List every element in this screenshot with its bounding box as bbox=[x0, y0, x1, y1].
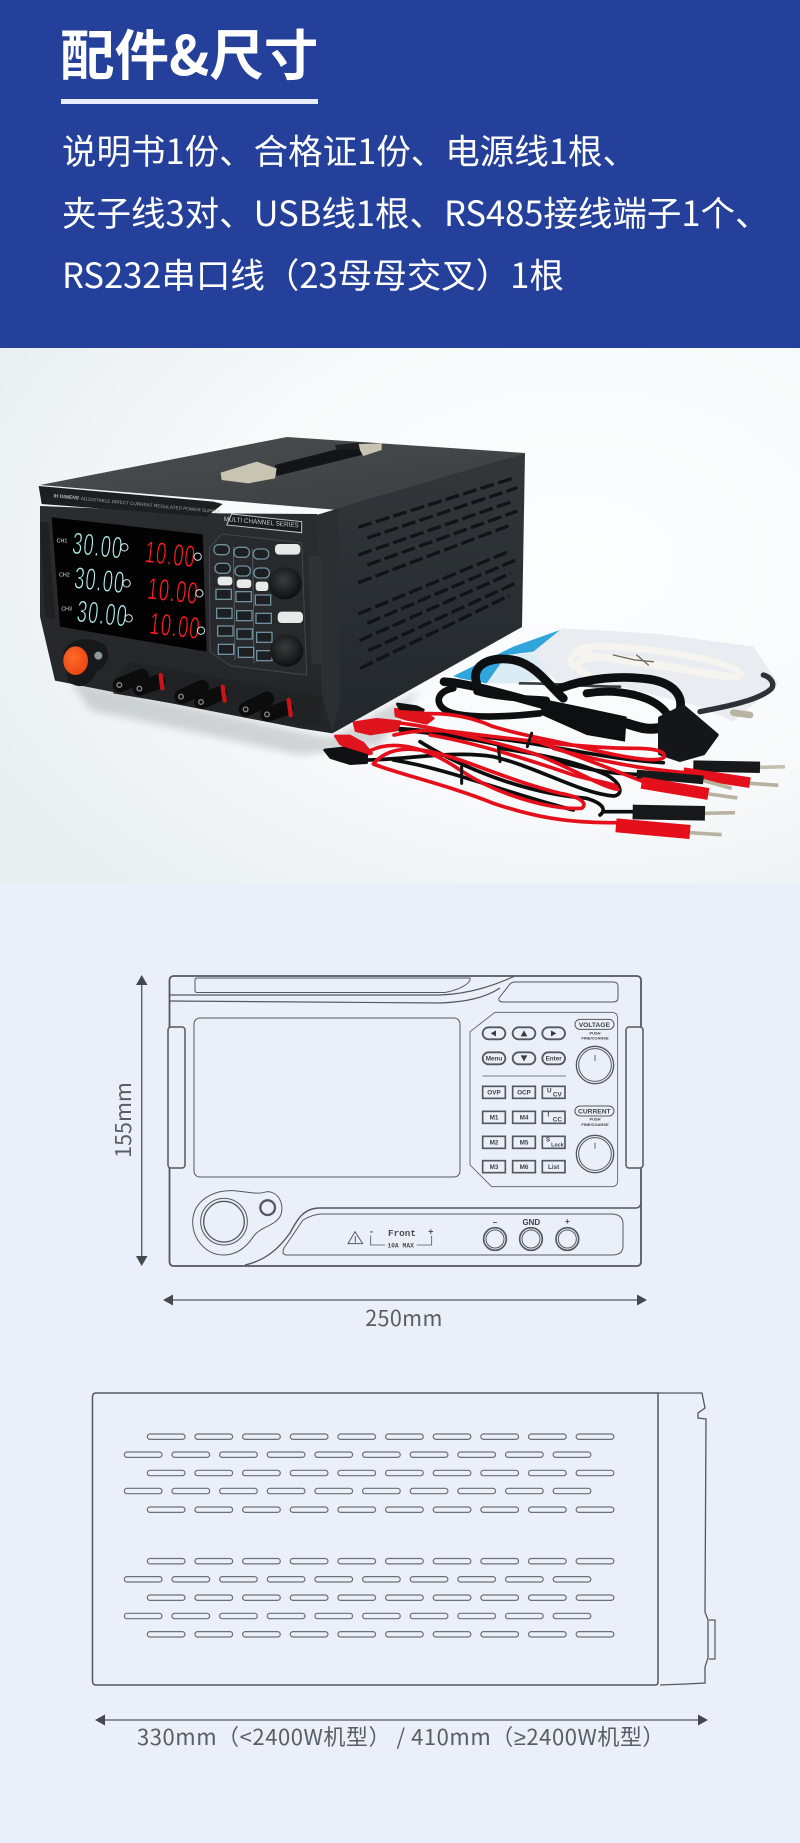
warning triangle bbox=[348, 1232, 363, 1244]
right handle bbox=[626, 1027, 643, 1168]
square key labels: CC bbox=[553, 1116, 562, 1123]
device side face bbox=[333, 453, 525, 733]
side view drawing bbox=[92, 1393, 715, 1685]
width label: 250mm bbox=[365, 1302, 443, 1333]
voltage readouts: 30.00 bbox=[75, 595, 130, 634]
front terminal labels bbox=[348, 1227, 434, 1249]
power supply unit bbox=[39, 437, 525, 733]
device floor shadow bbox=[70, 680, 420, 755]
model text: ADJUSTABLE DIRECT CURRENT REGULATED POWER SUPPLY bbox=[81, 496, 220, 514]
front face bbox=[40, 506, 340, 733]
current readouts: 10.00 bbox=[148, 607, 202, 646]
white keys bbox=[218, 544, 303, 623]
square key labels: M2 bbox=[490, 1140, 499, 1147]
round keys bbox=[483, 1027, 565, 1064]
menu key labels: Enter bbox=[546, 1056, 562, 1063]
output terminal sockets: – bbox=[493, 1218, 498, 1227]
ventilation slots bbox=[124, 1434, 614, 1637]
emergency stop button bbox=[63, 639, 108, 686]
square keys bbox=[483, 1086, 565, 1173]
black power cord bbox=[439, 659, 717, 760]
square key labels bbox=[487, 1088, 564, 1171]
square key labels: OVP bbox=[487, 1090, 501, 1097]
output terminal sockets bbox=[484, 1217, 579, 1250]
square key labels: U bbox=[547, 1088, 552, 1095]
alligator clips bbox=[325, 704, 433, 764]
length label: 330mm（<2400W机型） / 410mm（≥2400W机型） bbox=[137, 1720, 665, 1752]
current control: PUSH bbox=[589, 1117, 601, 1122]
arrow glyphs bbox=[491, 1030, 556, 1061]
current knob bbox=[270, 635, 303, 667]
square key labels: S bbox=[546, 1137, 550, 1144]
top label strip bbox=[39, 486, 223, 517]
current control: FINE/COARSE bbox=[581, 1122, 609, 1127]
power switch housing bbox=[193, 1191, 282, 1255]
current readouts: 10.00 bbox=[143, 535, 198, 575]
keypad buttons bbox=[214, 545, 272, 661]
terminal panel bbox=[283, 1214, 623, 1255]
left handle bbox=[168, 1027, 185, 1168]
banana plugs bbox=[616, 766, 785, 835]
device top face bbox=[40, 437, 525, 510]
unit marks bbox=[121, 544, 205, 634]
top divider bbox=[170, 976, 515, 1003]
keypad outline bbox=[470, 1012, 618, 1187]
rating text: 10A MAX bbox=[387, 1242, 414, 1249]
arrow: width dimension bbox=[163, 1294, 647, 1306]
voltage readouts: 30.00 bbox=[73, 561, 127, 601]
current readouts: 10.00 bbox=[146, 572, 200, 611]
voltage readouts bbox=[71, 527, 130, 634]
panel: dimension drawings bbox=[92, 975, 716, 1752]
square key labels: M4 bbox=[520, 1115, 529, 1122]
photo background bbox=[0, 348, 800, 883]
accessories list: RS232串口线（23母母交叉）1根 bbox=[62, 248, 564, 298]
plus sign: + bbox=[428, 1227, 434, 1238]
channel labels bbox=[57, 539, 72, 613]
right flap bbox=[308, 555, 322, 665]
current readouts bbox=[143, 535, 202, 646]
front view drawing bbox=[168, 976, 643, 1266]
header panel bbox=[0, 0, 800, 348]
square key labels: CV bbox=[553, 1091, 563, 1098]
output terminal sockets: + bbox=[565, 1217, 570, 1226]
square key labels: M5 bbox=[520, 1140, 529, 1147]
display window bbox=[194, 1018, 460, 1177]
accessories list: 说明书1份、合格证1份、电源线1根、 bbox=[62, 124, 637, 174]
accessories list: 夹子线3对、USB线1根、RS485接线端子1个、 bbox=[62, 186, 770, 236]
series badge bbox=[227, 514, 302, 533]
voltage control: VOLTAGE bbox=[579, 1022, 610, 1029]
square key labels: M3 bbox=[490, 1164, 499, 1171]
voltage control: FINE/COARSE bbox=[581, 1036, 609, 1041]
height label: 155mm bbox=[107, 1082, 138, 1158]
output terminal sockets: GND bbox=[522, 1218, 540, 1227]
output terminals bbox=[113, 662, 322, 725]
lower panel outline bbox=[245, 1203, 641, 1265]
polarity bracket bbox=[371, 1236, 432, 1245]
top strip bbox=[195, 978, 470, 992]
keypad panel bbox=[209, 534, 307, 675]
channel labels: CH2 bbox=[59, 573, 70, 579]
menu key labels: Menu bbox=[486, 1056, 502, 1063]
arrow: length dimension bbox=[95, 1714, 708, 1726]
voltage readouts: 30.00 bbox=[71, 527, 125, 566]
plastic bag with white cable bbox=[453, 628, 778, 722]
keypad dividers bbox=[233, 547, 254, 663]
panel: product photo bbox=[0, 348, 800, 883]
square key labels: Lock bbox=[551, 1143, 564, 1149]
title underline bbox=[61, 99, 318, 104]
square key labels: I bbox=[547, 1112, 549, 1119]
rear body outline bbox=[658, 1393, 708, 1685]
enclosure outline bbox=[170, 976, 641, 1266]
minus sign: - bbox=[369, 1227, 374, 1238]
top right strip bbox=[499, 982, 618, 1002]
LED display bbox=[52, 517, 207, 652]
accessories: cables and leads bbox=[325, 628, 785, 835]
square key labels: M1 bbox=[490, 1115, 499, 1122]
title: 配件&尺寸 bbox=[60, 12, 318, 91]
test leads bbox=[325, 704, 785, 835]
square key labels: List bbox=[548, 1164, 560, 1171]
current control bbox=[575, 1106, 614, 1173]
keypad bbox=[470, 1012, 618, 1250]
voltage control: PUSH bbox=[589, 1031, 601, 1036]
square key labels: OCP bbox=[517, 1090, 531, 1097]
voltage control bbox=[575, 1019, 614, 1084]
current control: CURRENT bbox=[578, 1109, 611, 1116]
front text: Front bbox=[388, 1228, 416, 1239]
arrow: height dimension bbox=[136, 975, 148, 1266]
menu key labels bbox=[486, 1056, 562, 1063]
channel labels: CH1 bbox=[57, 539, 67, 545]
channel labels: CH3 bbox=[61, 607, 72, 613]
device front details bbox=[39, 443, 382, 733]
brand text: IH DIMENS bbox=[53, 493, 80, 502]
series text: MULTI CHANNEL SERIES bbox=[223, 516, 300, 530]
carry handle bbox=[221, 443, 382, 483]
accessories list bbox=[62, 124, 770, 298]
square key labels: M6 bbox=[520, 1164, 529, 1171]
main body outline bbox=[92, 1393, 658, 1685]
voltage knob bbox=[268, 567, 302, 599]
rear connector bbox=[709, 1620, 715, 1659]
left flap bbox=[40, 522, 55, 620]
side vents bbox=[358, 479, 517, 668]
